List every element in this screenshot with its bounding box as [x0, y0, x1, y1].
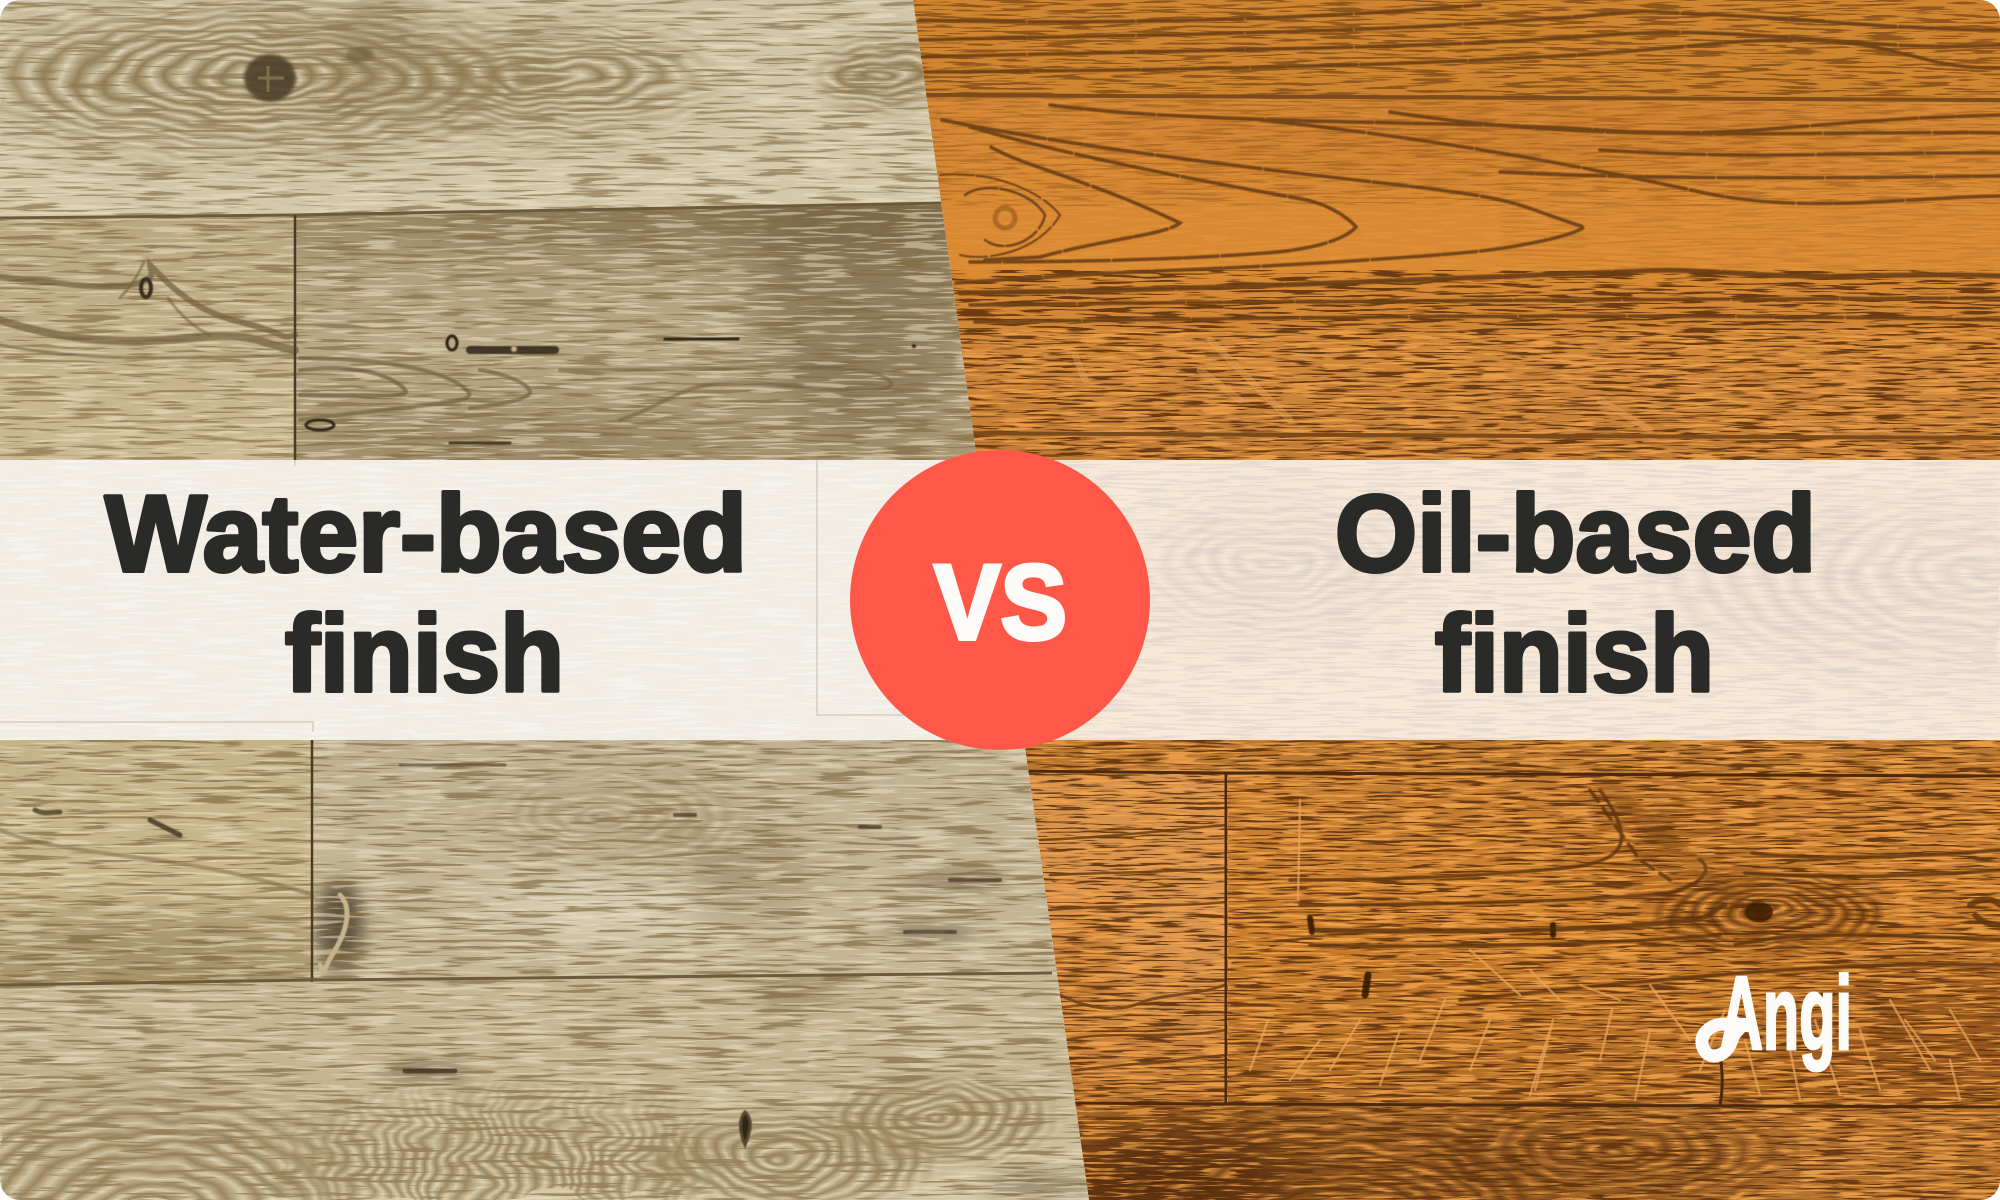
- heading: water-based finish: finish: [285, 593, 564, 715]
- faint rings on middle-lower pale plank: [440, 750, 800, 900]
- swirling ring grain on oil-based lower planks: [1083, 860, 1896, 1200]
- upper knot: [244, 47, 374, 102]
- knots on lower pale planks: [0, 765, 1000, 1145]
- heading: oil-based finish: Oil-based: [1335, 473, 1816, 595]
- oil-based plank seams: [900, 95, 2000, 1107]
- panel: water-based pale wood planks: [0, 0, 1100, 1200]
- heading: oil-based finish: finish: [1435, 593, 1714, 715]
- fine grain texture on orange planks: [900, 0, 2000, 1200]
- wood rings on lower pale plank: [0, 1060, 1080, 1200]
- heading: oil-based finish: [1335, 473, 1816, 715]
- knots and grain on middle pale planks: [0, 262, 916, 443]
- wood rings on upper pale plank: [0, 0, 950, 200]
- light scratches on oil-based plank: [1075, 340, 1980, 1100]
- top plank lines: [920, 5, 1480, 22]
- grain and knot lines on small oil-based plank: [1040, 825, 1226, 1070]
- knot rings: [965, 188, 1045, 246]
- logo: Angi wordmark: Angi: [1720, 956, 1852, 1072]
- heading: water-based finish: Water-based: [105, 473, 747, 595]
- panel: oil-based orange wood planks: [900, 0, 2000, 1200]
- faint plank seams inside band: [0, 460, 1000, 732]
- panel: translucent title band: [0, 460, 2000, 740]
- badge: vs circle: [850, 450, 1150, 750]
- heading: water-based finish: [105, 473, 747, 715]
- tonal blotches on pale planks: [0, 0, 1100, 1199]
- logo: Angi wordmark: [1702, 956, 1852, 1072]
- cathedral grain lines on upper oil-based plank: [920, 5, 2000, 322]
- curved grain on large oil-based lower plank: [1290, 780, 2000, 1000]
- water-based plank seams: [0, 200, 1100, 985]
- tonal blotches on orange planks: [1040, 105, 2000, 1200]
- fine grain texture on pale planks: [0, 0, 1100, 1200]
- badge: vs circle: VS: [934, 542, 1067, 662]
- faint grain rings inside band: [1130, 470, 2000, 730]
